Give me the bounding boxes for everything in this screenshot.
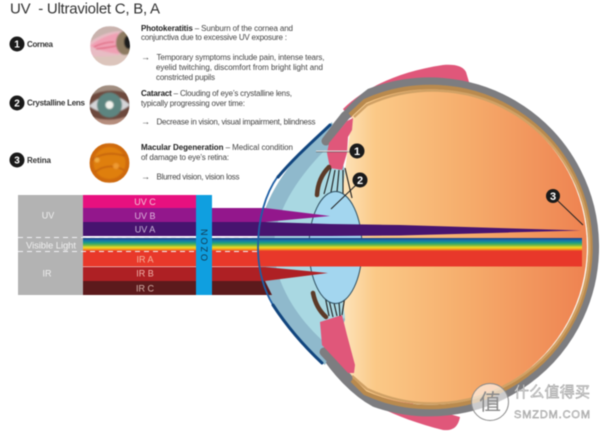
band labels: IR A: [136, 254, 154, 264]
crystalline lens: [309, 192, 362, 304]
outer gray ring: [324, 82, 595, 412]
eye diagram: [258, 65, 595, 430]
panel: retina row: [10, 143, 293, 183]
text: macular degeneration: Macular Degeneration – Medical condition: [141, 143, 293, 152]
text: photokeratitis: Photokeratitis – Sunburn of the cornea and: [141, 24, 293, 33]
ciliary muscle top: [317, 167, 329, 195]
text: photokeratitis: [141, 24, 324, 82]
bottom sclera pink: [343, 375, 460, 430]
dashed dividers: [18, 238, 258, 252]
text: photokeratitis: eyelid twitching, discomfort from bright light and: [156, 63, 323, 72]
text: macular degeneration: [141, 143, 293, 182]
label: IR: IR: [42, 268, 52, 278]
band labels: [134, 211, 156, 294]
callout 1: 1: [354, 146, 360, 158]
watermark: [472, 384, 590, 421]
ozone layer: [196, 195, 212, 295]
visible rainbow band: [83, 238, 582, 251]
text: cataract: →: [141, 116, 150, 126]
icon: number 3: 3: [14, 156, 20, 166]
callout 3: 3: [550, 191, 556, 203]
text: cataract: typically progressing over time:: [141, 99, 245, 108]
gray label block: [18, 195, 83, 295]
IR B band: [83, 267, 328, 281]
UV B band: [83, 208, 330, 222]
ozone layer: OZON: [200, 229, 210, 261]
icon: number 3: [10, 152, 24, 168]
label: Crystalline Lens: Crystalline Lens: [27, 98, 86, 108]
label: Retina: Retina: [27, 156, 52, 165]
watermark text: 什么值得买: [514, 384, 590, 401]
icon: number 1: [10, 36, 24, 52]
band labels: UV B: [134, 211, 156, 221]
dark tan ring: [349, 87, 590, 407]
text: photokeratitis: constricted pupils: [156, 73, 215, 82]
top iris: [327, 118, 353, 170]
callout 2: 2: [357, 175, 363, 187]
panel: lens row: [10, 85, 316, 126]
UV C band: UV C: [134, 197, 156, 207]
gray limbus top cover: [326, 116, 345, 141]
panel: cornea row: [10, 24, 324, 82]
text: macular degeneration: of damage to eye’s retina:: [141, 153, 229, 162]
callout 1: [316, 144, 364, 158]
zonule fibers: [324, 168, 352, 317]
light beams: [83, 195, 582, 295]
text: photokeratitis: Temporary symptoms include pain, intense tears,: [156, 53, 324, 62]
UV A band: [83, 222, 581, 236]
band labels: IR B: [136, 268, 154, 278]
watermark badge: 值: [479, 390, 501, 415]
aqueous humour: [274, 150, 345, 340]
gray limbus bottom cover: [324, 352, 348, 378]
text: photokeratitis: conjunctiva due to excessive UV exposure :: [141, 33, 287, 42]
text: cataract: Decrease in vision, visual impairment, blindness: [156, 118, 316, 126]
photo: retina: [89, 143, 130, 183]
UV C band: [83, 195, 197, 208]
text: cataract: Cataract – Clouding of eye’s crystalline lens,: [141, 89, 292, 98]
text: macular degeneration: →: [141, 172, 150, 182]
label: Visible Light: Visible Light: [26, 240, 76, 252]
text: cataract: [141, 89, 316, 126]
band labels: IR C: [136, 284, 155, 294]
band labels: UV A: [135, 224, 155, 234]
bottom iris: [320, 315, 355, 373]
cornea band: [258, 122, 345, 365]
ciliary muscle bottom: [313, 293, 326, 317]
light tan ring: [352, 91, 589, 404]
interior of the eye: [335, 88, 587, 404]
label: UV: UV: [42, 210, 54, 220]
text: macular degeneration: Blurred vision, vision loss: [156, 172, 240, 182]
icon: number 1: 1: [14, 40, 20, 50]
text: photokeratitis: →: [141, 52, 150, 62]
icon: number 2: [10, 96, 24, 110]
title: UV - Ultraviolet C, B, A: [10, 0, 160, 18]
label: Cornea: Cornea: [27, 40, 54, 49]
top sclera pink: [343, 65, 469, 118]
cornea outline: [258, 125, 330, 363]
IR C band: [83, 281, 272, 295]
photo: cataract eye: [89, 85, 130, 125]
panel: spectrum labels: [18, 195, 83, 295]
callout 2: [331, 172, 368, 209]
callout 3: [546, 189, 583, 225]
IR A band: [83, 251, 582, 266]
photo: red eye: [90, 26, 134, 66]
watermark url: SMZDM.COM: [514, 409, 590, 421]
icon: number 2: 2: [14, 98, 20, 110]
